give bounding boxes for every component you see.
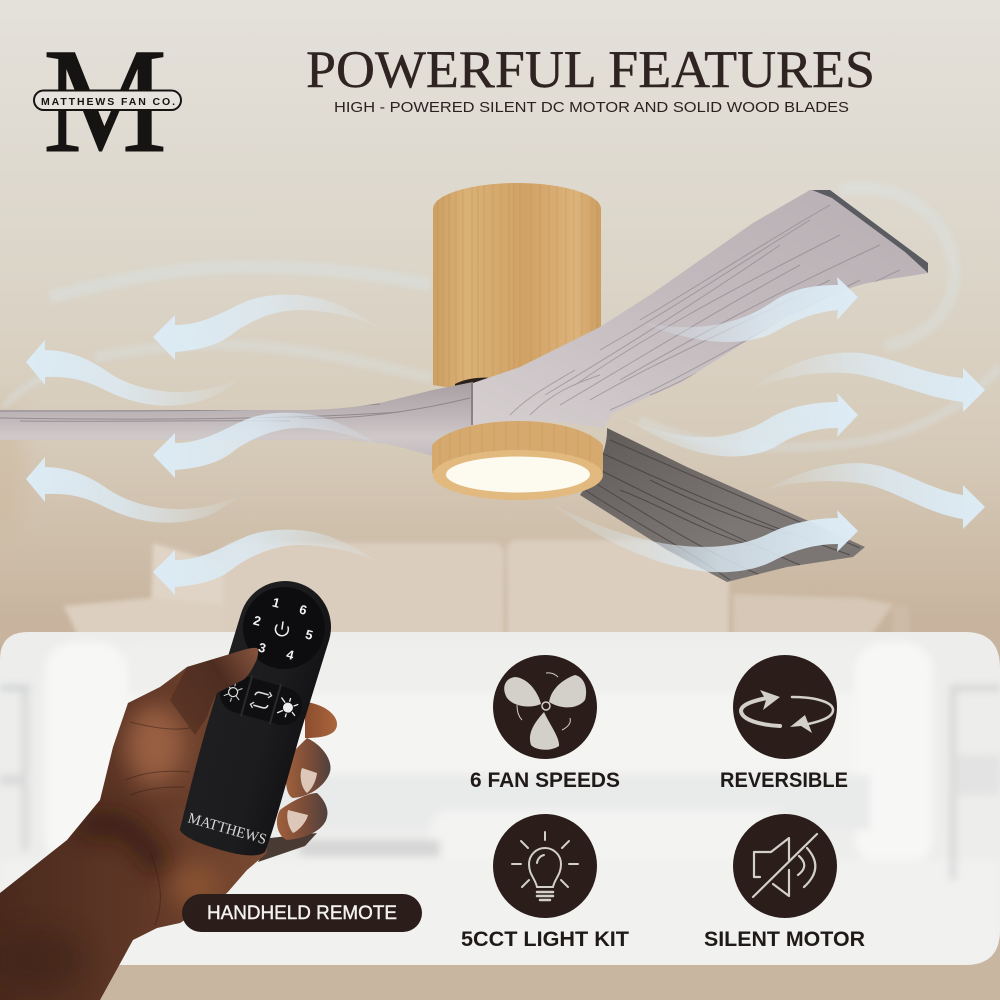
feature: 5CCT light kit: 5CCT LIGHT KIT: [461, 928, 629, 951]
icon: light bulb: [493, 814, 597, 918]
hand: skin shading: [0, 705, 221, 990]
airflow arrows pointing right: [550, 277, 985, 572]
label pill: handheld remote: [182, 894, 422, 932]
feature: 6 fan speeds: [470, 655, 620, 792]
remote: speed numbers: 3: [257, 639, 268, 656]
feature: silent motor: SILENT MOTOR: [704, 928, 865, 951]
remote: speed numbers: 1: [271, 594, 282, 611]
remote: power icon: [275, 622, 288, 636]
airflow arrows pointing left: [26, 295, 383, 595]
remote: speed numbers: 4: [285, 646, 296, 663]
remote: speed numbers: [252, 594, 315, 663]
fan: left blade: [0, 382, 473, 456]
hand: palm and wrist: [0, 648, 337, 1000]
hand: thumb: [170, 648, 258, 735]
icon: muted speaker: [733, 814, 837, 918]
label pill: handheld remote: HANDHELD REMOTE: [207, 903, 397, 924]
logo wordmark: MATTHEWS FAN CO.: [41, 96, 175, 108]
background sofa cushions: [64, 540, 909, 645]
panel: features: [0, 632, 1000, 965]
feature: 6 fan speeds: 6 FAN SPEEDS: [470, 769, 620, 792]
faint air current swirls: [2, 188, 1000, 447]
hand: back fingers: [258, 702, 337, 862]
remote: button strip: [215, 668, 307, 732]
logo: M: [43, 18, 167, 184]
title: POWERFUL FEATURES: [306, 41, 875, 99]
feature: silent motor: [704, 814, 865, 951]
remote: speed numbers: 2: [252, 612, 263, 629]
fan: lower dark blade: [580, 428, 865, 582]
icon: fan: [493, 655, 597, 759]
remote: brand text: MATTHEWS: [186, 810, 268, 848]
feature: reversible: [720, 655, 848, 792]
feature: 5CCT light kit: [461, 814, 629, 951]
logo pill: [34, 90, 181, 110]
remote: dial: [243, 587, 325, 669]
fan: glowing light: [446, 456, 590, 492]
remote: speed numbers: 5: [304, 626, 315, 643]
fan: light kit ring: [432, 420, 603, 500]
icon: rotate arrows: [733, 655, 837, 759]
fan: motor housing cylinder: [433, 180, 601, 400]
feature: reversible: REVERSIBLE: [720, 769, 848, 792]
remote: speed numbers: 6: [298, 601, 309, 618]
subtitle: HIGH - POWERED SILENT DC MOTOR AND SOLID WOOD BLADES: [334, 99, 849, 116]
fan: upper right blade: [472, 190, 928, 428]
remote control: [175, 570, 342, 863]
